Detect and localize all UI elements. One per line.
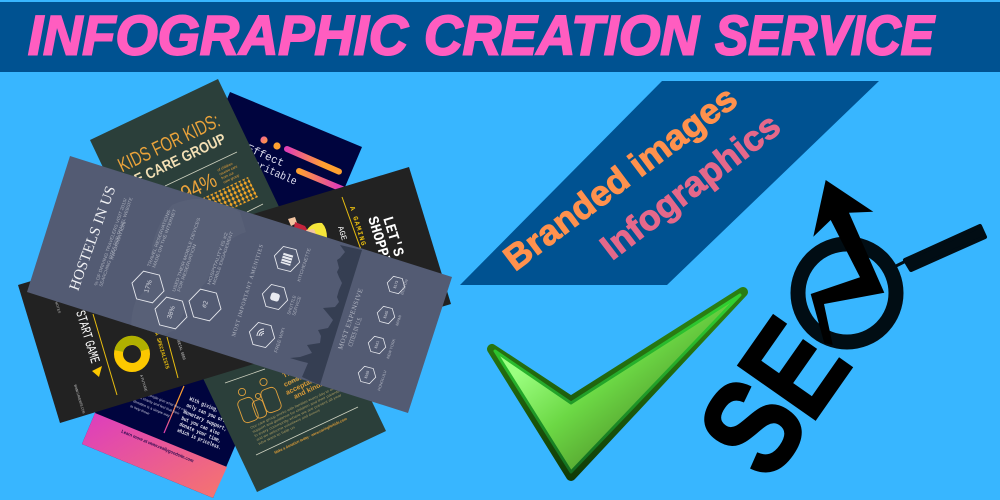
giving text <box>176 395 231 451</box>
icon: shuttle <box>270 292 280 302</box>
giving text: donate your time, <box>178 421 222 445</box>
panel: green kids care card <box>90 79 386 492</box>
intro text: % OF DRIVING TRAVELERS VISIT 2015/ <box>93 197 128 286</box>
dot grid chart <box>203 177 258 218</box>
stat captions: TRAVEL RESERVATIONS <box>146 209 171 267</box>
stat captions: HOSPITALITY IS #2 <box>206 231 229 285</box>
magnifier handle <box>896 226 985 270</box>
heading: most expensive cities: MOST EXPENSIVE <box>337 288 365 351</box>
text: branded images: Branded images <box>496 78 745 278</box>
amenity labels: KITCHENETTE <box>296 247 312 282</box>
title <box>28 4 935 66</box>
rule <box>165 152 237 186</box>
title: SERVICE <box>715 4 935 66</box>
heading: start game <box>71 309 101 365</box>
quote text: The love, <box>282 360 312 380</box>
city hexagon values <box>364 280 399 379</box>
icon: family figures <box>236 378 283 424</box>
world map <box>132 200 232 335</box>
age label: AGE <box>335 225 348 242</box>
hexagon stat values: #2 <box>201 300 210 309</box>
card heading <box>240 143 298 189</box>
small left text <box>130 389 188 418</box>
text: SE letters: E <box>709 293 879 443</box>
small stat text: receive care <box>219 164 238 176</box>
icon: green check mark <box>492 292 743 476</box>
quote text: constant care, <box>283 362 329 389</box>
small stat text <box>217 162 240 184</box>
card heading: Effect <box>244 143 285 170</box>
call to action: Make a donation today · www.caringforkids.com <box>273 416 348 455</box>
city labels: HONOLULU <box>377 370 388 391</box>
donut caption: A FUTURE <box>139 374 148 392</box>
magnifier ring <box>798 244 896 342</box>
panel: navy charity infographic card <box>82 92 362 498</box>
small left text: to a charity and feel that their <box>136 394 181 416</box>
amenity hexagons <box>247 245 302 349</box>
statistic 94%: 94% <box>177 169 221 206</box>
quote text <box>282 360 336 401</box>
divider line <box>164 386 184 433</box>
heading: hostels in us: HOSTELS IN US <box>67 184 119 293</box>
card heading: Charitable <box>240 154 298 189</box>
yellow rules <box>93 197 364 395</box>
stat captions: FOR RESERVATION <box>176 243 197 292</box>
yellow label: A SPECIALISTS <box>153 332 171 370</box>
icon: SEO magnifier logo <box>668 180 985 500</box>
amenity labels: SHUTTLE <box>286 295 297 315</box>
city hexagon values: $158 <box>364 370 370 379</box>
heading: most expensive cities: CITIES IN U.S. <box>347 316 364 348</box>
icon: wifi <box>257 329 264 336</box>
city hexagons <box>356 275 407 385</box>
city hexagon values: $173 <box>393 280 399 289</box>
stat captions: USED THEIR MOBILE DEVICES <box>171 217 201 292</box>
pink footer <box>82 413 227 498</box>
quote text: acceptance <box>285 374 322 397</box>
giving text: which is priceless. <box>176 427 222 451</box>
small stat text: care group <box>223 173 240 184</box>
small left text: Many people give what they can <box>139 389 188 413</box>
panel: dark gaming card <box>18 167 451 423</box>
body paragraph: in every community where we are present all year <box>254 393 343 438</box>
giving text: but you can also <box>180 415 221 437</box>
subheading: a gaming: A GAMING <box>347 206 367 248</box>
stat captions: MADE ON THE INTERNET <box>151 208 177 268</box>
growth arrow <box>811 180 884 345</box>
body paragraph: and we welcome volunteers and donors <box>256 408 321 442</box>
body paragraph: support and guidance for children and their parents <box>252 389 340 434</box>
title: INFOGRAPHIC <box>28 4 410 66</box>
city labels: BOSTON <box>400 279 409 295</box>
intro text: SEARCHING SITES FOR TRAVEL WEBSITE <box>98 197 134 287</box>
panel: grey hostels card <box>27 156 452 413</box>
body paragraph: Our care group works with families every day to offer <box>250 385 339 430</box>
website: WWW.GAMEWEB.COM <box>73 384 86 414</box>
city labels: NEW YORK <box>386 338 396 359</box>
heading: let's shopping: LET'S <box>378 214 406 259</box>
gradient bars <box>287 149 347 191</box>
banner: branded images and infographics <box>460 78 879 285</box>
icon: kitchenette <box>281 253 293 266</box>
heading: kids for kids: KIDS FOR KIDS: <box>115 110 224 177</box>
skyline <box>290 245 362 385</box>
donut chart <box>118 340 146 368</box>
body paragraph: Families and caregivers come together <box>288 352 352 385</box>
intro text: INFORMATION <box>109 221 127 260</box>
hexagon stat values: 17% <box>143 279 154 294</box>
heading: most important amenities: MOST IMPORTANT AMENITIES <box>231 244 265 338</box>
heading: the care group: THE CARE GROUP <box>116 131 229 196</box>
icon: pixel character <box>288 217 327 238</box>
stat captions <box>146 208 234 292</box>
heading: let's shopping: SHOPPING <box>363 214 399 283</box>
small left text: to help those <box>130 404 150 416</box>
body paragraph <box>250 352 352 446</box>
small left text: donation is a simple way <box>133 399 170 418</box>
rule <box>256 407 358 455</box>
small stat text: of children <box>217 162 233 172</box>
giving text: monetary support, <box>182 408 228 433</box>
small stat text: from our <box>221 171 235 180</box>
stat captions: MOBILE ENGAGEMENT <box>211 230 234 285</box>
small note: NOTES <box>54 301 62 314</box>
title: CREATION <box>424 4 700 66</box>
hexagon stat values <box>143 279 210 320</box>
body paragraph: who want to help us <box>258 425 296 446</box>
footer link: Learn more at www.reallygoodsite.com <box>121 429 195 463</box>
amenity labels <box>273 247 312 353</box>
city labels <box>377 279 409 391</box>
heading: start game: GAME <box>80 339 101 365</box>
quote text: and kindness <box>293 375 336 401</box>
city hexagon values: $161 <box>374 340 380 349</box>
city labels: MIAMI <box>395 315 402 326</box>
icon: gradient dots <box>260 136 281 150</box>
icon: yellow triangle <box>92 366 102 377</box>
text: infographics: Infographics <box>593 106 788 267</box>
heading: start game: START <box>71 309 94 341</box>
white label: SOCIAL GOOD <box>175 339 185 361</box>
giving text: With giving, <box>188 395 220 414</box>
giving text: only can you offer <box>185 402 231 426</box>
header band <box>0 2 1000 72</box>
amenity labels: FREE WIFI <box>273 327 286 353</box>
hexagon stat values: 38% <box>166 305 177 320</box>
text: SE letters: S <box>668 352 837 500</box>
lower rules <box>225 204 265 383</box>
city hexagon values: $165 <box>383 310 389 319</box>
amenity labels: SERVICE <box>291 296 302 316</box>
hexagon stats <box>129 269 224 331</box>
